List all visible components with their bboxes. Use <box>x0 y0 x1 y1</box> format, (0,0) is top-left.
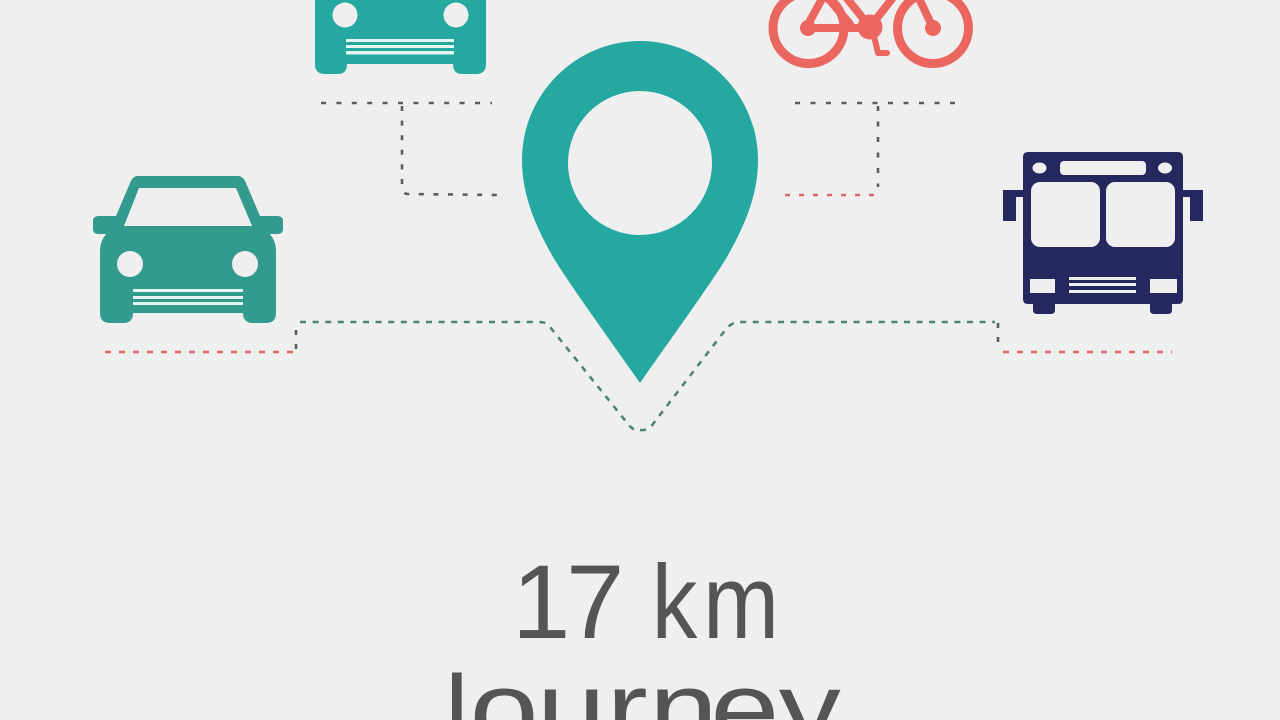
heading: 17 km Journey: km <box>652 543 779 660</box>
heading: 17 km Journey <box>409 543 841 720</box>
icon: location pin <box>522 41 758 383</box>
connector: dashed route from left car to pin <box>105 322 640 430</box>
icon: bicycle, coral <box>773 0 968 64</box>
connector: dashed route from pin to bus <box>640 322 1172 430</box>
icon: top car, teal <box>315 0 486 74</box>
connector: top right dashed line <box>785 103 960 195</box>
icon: bus, navy <box>1003 152 1203 314</box>
heading: 17 km Journey: 17 <box>512 544 624 661</box>
icon: left car, green teal <box>93 176 283 323</box>
connector: top left dashed line <box>321 103 497 195</box>
